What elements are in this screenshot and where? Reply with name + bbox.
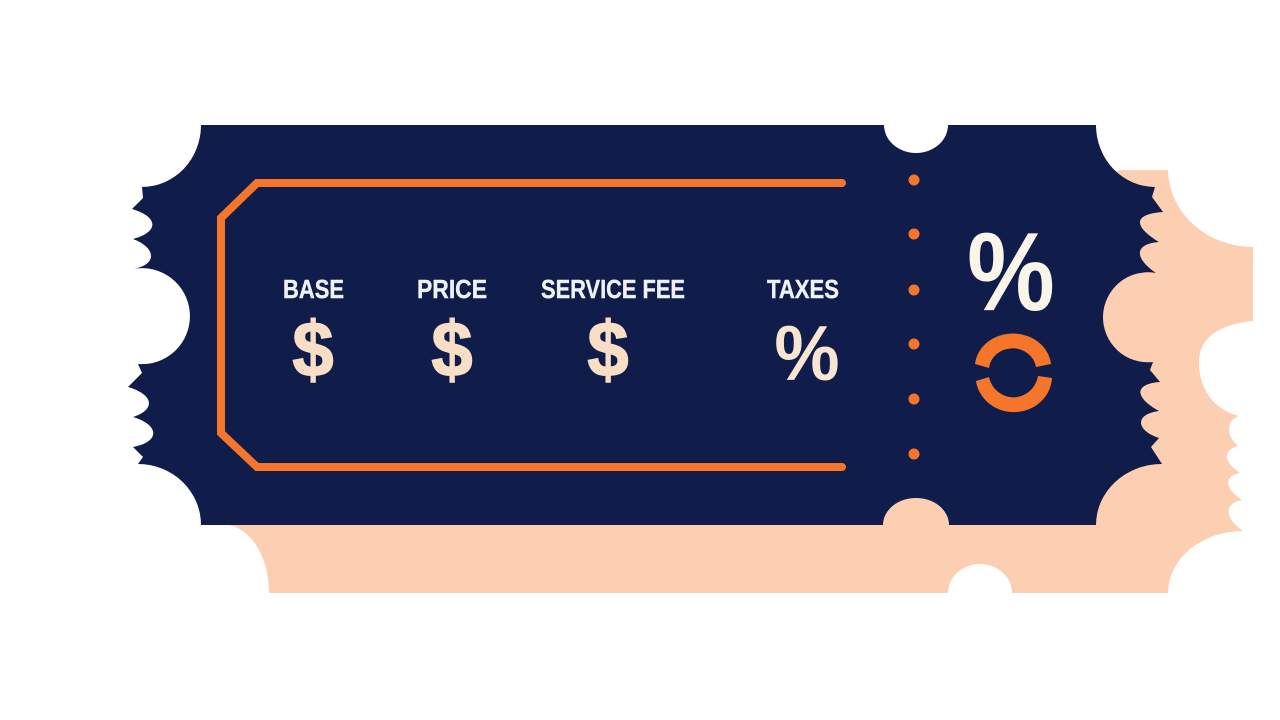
orange price frame (221, 183, 842, 467)
label: base: BASE (283, 274, 344, 304)
price item: taxes (767, 274, 840, 398)
perforation dots (908, 174, 920, 460)
stub icon: split orange ring (975, 333, 1052, 412)
stub icon: large percent sign: % (967, 210, 1055, 334)
price item: service fee (541, 274, 685, 393)
peach ticket shadow (228, 170, 1253, 593)
label: taxes: TAXES (767, 274, 839, 304)
icon: dollar sign: $ (431, 306, 473, 393)
icon: percent sign: % (774, 310, 840, 398)
price item: price (417, 274, 487, 393)
label: service fee: SERVICE FEE (541, 274, 685, 304)
icon: dollar sign: $ (292, 306, 334, 393)
icon: dollar sign: $ (587, 306, 629, 393)
navy ticket body (128, 125, 1163, 525)
price item: base (283, 274, 344, 393)
label: price: PRICE (417, 274, 487, 304)
